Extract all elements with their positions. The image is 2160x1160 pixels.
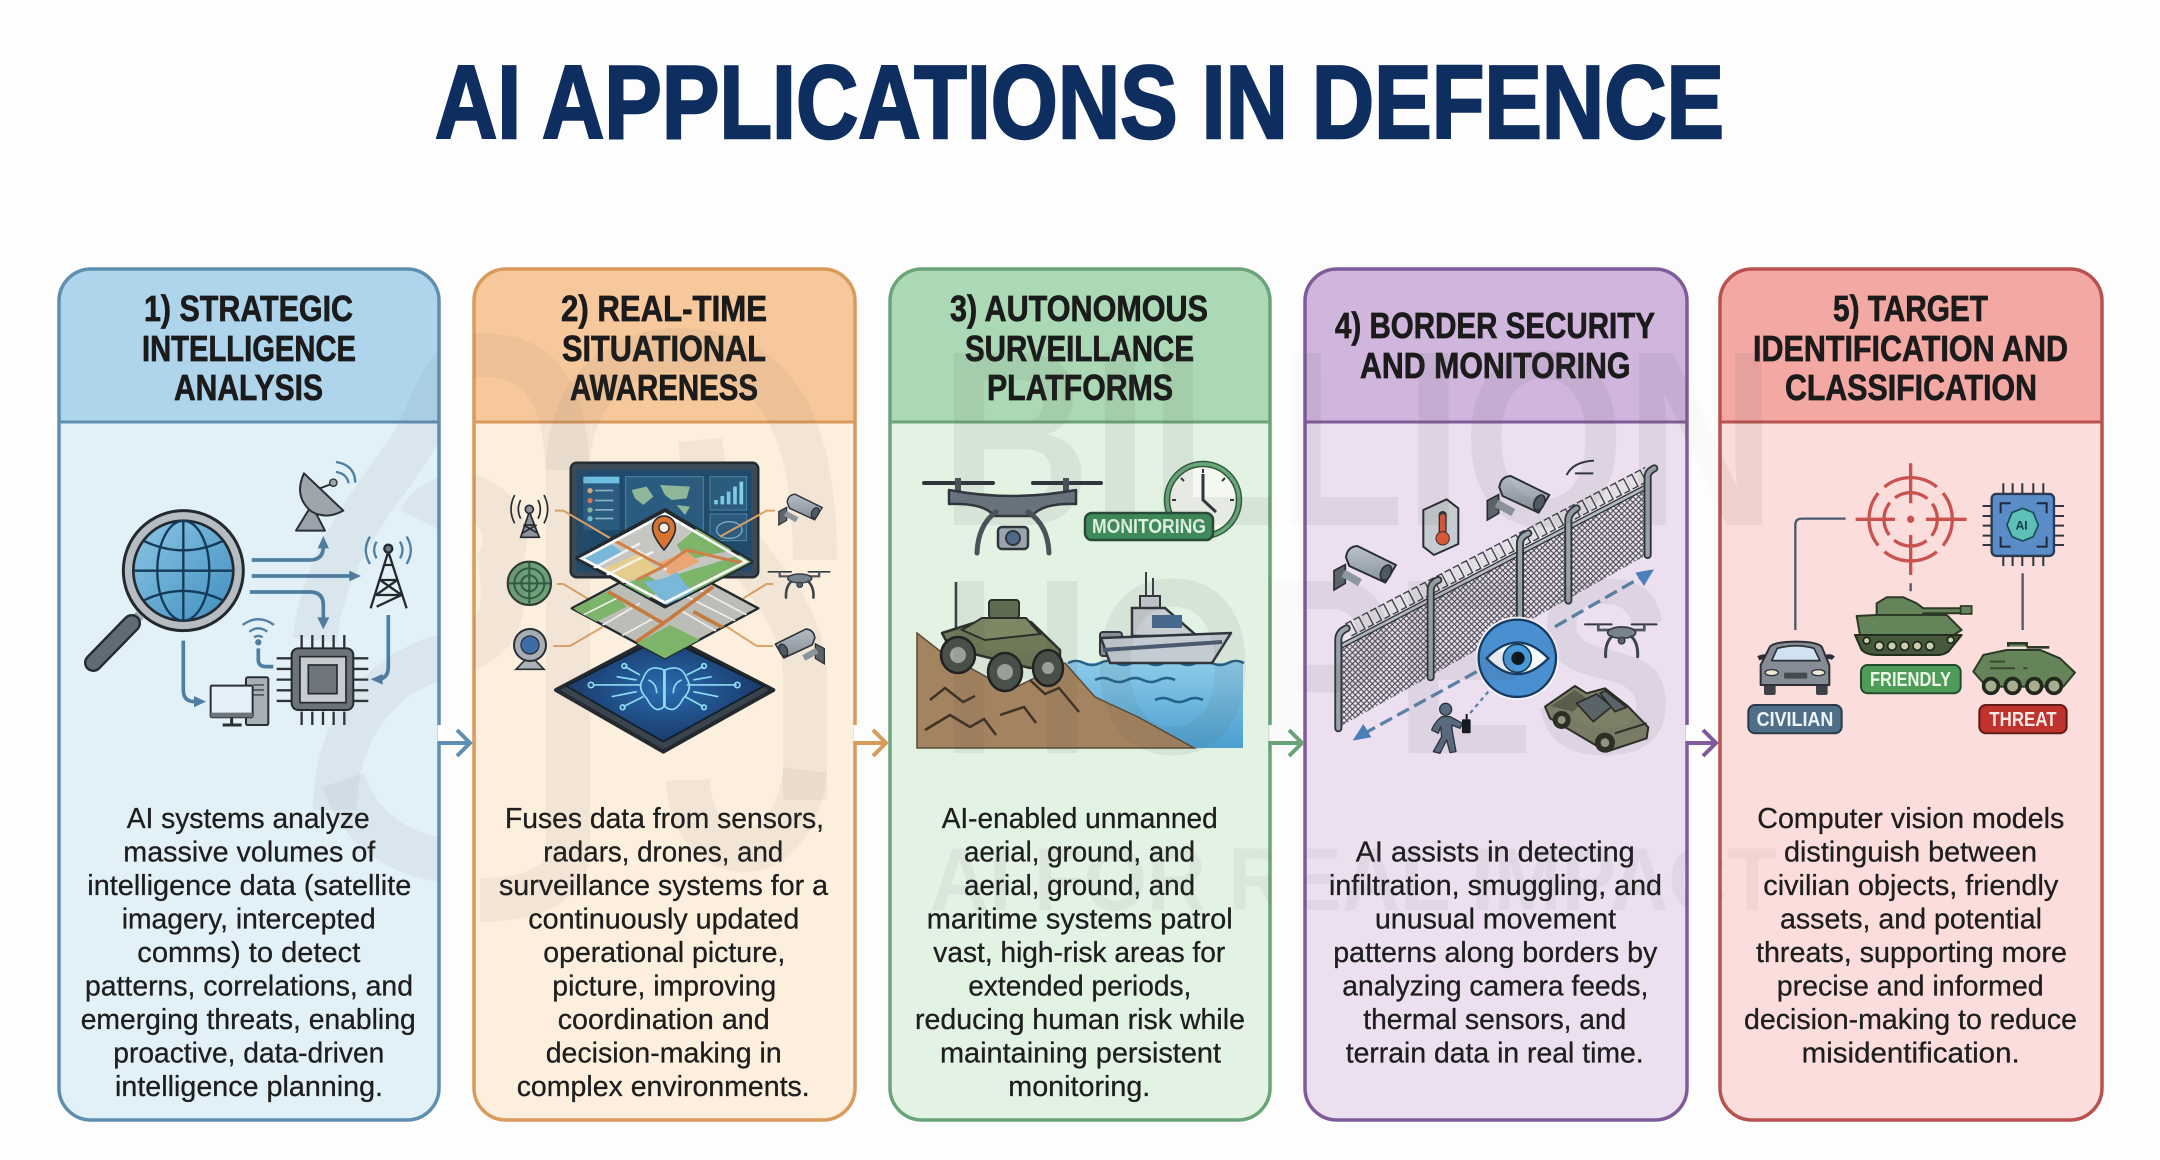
icon: wifi signal <box>243 619 274 644</box>
icon: quadcopter drone <box>924 478 1101 553</box>
panel 1 heading: 1) STRATEGIC <box>144 288 353 329</box>
panel 5 body text <box>1744 803 2077 1070</box>
icon: AI eye <box>1476 617 1559 700</box>
panel 5 heading: CLASSIFICATION <box>1785 367 2037 408</box>
panel 5 heading: 5) TARGET <box>1833 288 1988 329</box>
panel 2 body text <box>499 803 829 1103</box>
panel 1 body text: intelligence planning. <box>115 1071 383 1103</box>
icon: pickup truck <box>1545 686 1648 753</box>
icon: clock <box>1167 464 1239 536</box>
panel 5 body text: assets, and potential <box>1780 904 2042 936</box>
panel: real-time situational awareness <box>474 269 855 1120</box>
icon: lower map layer <box>570 582 760 660</box>
panel 2 body text: coordination and <box>558 1004 770 1036</box>
panel 2 body text: complex environments. <box>517 1071 810 1103</box>
panel 1 body text: patterns, correlations, and <box>85 970 413 1002</box>
icon: friendly tank <box>1855 597 1972 655</box>
badge: friendly <box>1861 665 1961 693</box>
panel 5 body text: distinguish between <box>1784 836 2037 868</box>
panel 4 heading <box>1335 305 1655 386</box>
panel 1 body text: comms) to detect <box>137 937 360 969</box>
panel 4 body text <box>1329 836 1662 1070</box>
icon: radio tower <box>366 537 411 608</box>
panel 5 body text: decision-making to reduce <box>1744 1004 2077 1036</box>
panel 3 heading: SURVEILLANCE <box>965 328 1194 369</box>
panel 2 body text: decision-making in <box>546 1038 782 1070</box>
panel 4 body text: thermal sensors, and <box>1363 1004 1626 1036</box>
scene: rocky coast <box>917 633 1194 748</box>
panel 3 body text: extended periods, <box>968 970 1191 1002</box>
icon: person with radio <box>1432 703 1471 753</box>
panel 3 body text: maritime systems patrol <box>927 904 1233 936</box>
panel 5 body text: Computer vision models <box>1757 803 2064 835</box>
panel 3 body text: aerial, ground, and <box>964 836 1195 868</box>
watermark: Billion Hopes logo and wordmark: AI FOR REAL IMPACT <box>930 829 1777 929</box>
panel 1 body text <box>81 803 416 1103</box>
icon: AI chip: AI <box>2016 518 2028 532</box>
arrow: patrol direction <box>1353 569 1654 741</box>
panel 3 heading <box>950 288 1208 408</box>
icon: webcam <box>514 629 546 669</box>
panel 4 body text: analyzing camera feeds, <box>1342 970 1648 1002</box>
panel 1 body text: intelligence data (satellite <box>87 870 411 902</box>
panel 3 heading: 3) AUTONOMOUS <box>950 288 1208 329</box>
panel 4 body text: patterns along borders by <box>1333 937 1658 969</box>
icon: threat armoured vehicle <box>1973 643 2075 693</box>
panel 4 heading: AND MONITORING <box>1360 345 1630 386</box>
arrow: panel 3 to 4 <box>1268 725 1302 756</box>
badge: monitoring: MONITORING <box>1092 516 1206 538</box>
panel: border security and monitoring <box>1305 269 1687 1120</box>
panel 3 body text <box>915 803 1245 1103</box>
icon: magnifying glass over globe <box>93 511 243 663</box>
panel 4 heading: 4) BORDER SECURITY <box>1335 305 1655 346</box>
icon: security camera top <box>779 494 822 525</box>
panel 3 heading: PLATFORMS <box>987 367 1173 408</box>
panel: target identification and classification <box>1720 269 2102 1120</box>
panel 2 body text: continuously updated <box>528 904 799 936</box>
panel 1 illustration: data network <box>93 462 411 725</box>
icon: dashboard monitor <box>571 463 758 577</box>
icon: device with AI brain <box>556 633 773 752</box>
icon: distant drone fragment <box>1567 461 1594 475</box>
arrow: panel 1 to 2 <box>438 725 470 756</box>
panel: strategic intelligence analysis <box>59 269 439 1120</box>
arrow: panel 2 to 3 <box>854 725 886 756</box>
connector lines <box>553 511 775 646</box>
panel 1 heading: ANALYSIS <box>174 367 323 408</box>
panel 5 body text: civilian objects, friendly <box>1763 870 2059 902</box>
badge: threat: THREAT <box>1989 709 2057 731</box>
panel 5 body text: misidentification. <box>1802 1038 2020 1070</box>
panel 1 body text: AI systems analyze <box>127 803 370 835</box>
panel 3 illustration: unmanned platforms <box>917 464 1244 748</box>
panel 3 body text: aerial, ground, and <box>964 870 1195 902</box>
icon: upper map layer with location pin <box>577 510 753 607</box>
panel 5 illustration: target classification <box>1748 463 2075 733</box>
panel 5 header band <box>1720 269 2102 422</box>
panel: autonomous surveillance platforms <box>890 269 1270 1120</box>
panel 4 body text: AI assists in detecting <box>1356 836 1635 868</box>
panel 4 body text: terrain data in real time. <box>1346 1038 1644 1070</box>
icon: radar <box>508 562 551 605</box>
icon: AI chip <box>277 635 368 725</box>
panel 3 body text: vast, high-risk areas for <box>933 937 1226 969</box>
icon: chain-link fence <box>1338 468 1654 728</box>
panel 2 header band <box>474 269 855 422</box>
panel 1 body text: imagery, intercepted <box>122 904 376 936</box>
watermark: Billion Hopes logo and wordmark: BILLION <box>940 299 1776 578</box>
icon: security camera left <box>1334 546 1396 590</box>
panel 2 heading: 2) REAL-TIME <box>561 288 767 329</box>
icon: flow arrows <box>183 536 388 707</box>
badge: threat <box>1979 705 2067 733</box>
icon: patrol boat <box>1100 572 1231 663</box>
connector lines <box>1795 519 2023 630</box>
panel 5 heading <box>1753 288 2068 408</box>
panel 3 body text: reducing human risk while <box>915 1004 1245 1036</box>
panel 2 body text: Fuses data from sensors, <box>505 803 824 835</box>
panel 1 header band <box>59 269 439 422</box>
panel 1 body text: emerging threats, enabling <box>81 1004 416 1036</box>
panel 5 body text: threats, supporting more <box>1756 937 2067 969</box>
panel 2 heading: SITUATIONAL <box>562 328 766 369</box>
panel 2 body text: radars, drones, and <box>543 836 783 868</box>
panel 4 body text: infiltration, smuggling, and <box>1329 870 1662 902</box>
scene: water <box>1065 661 1244 748</box>
panel 1 heading <box>142 288 356 408</box>
panel 2 body text: surveillance systems for a <box>499 870 829 902</box>
watermark: Billion Hopes logo and wordmark: BILLION <box>940 299 1776 578</box>
icon: surveillance drone <box>1585 624 1657 657</box>
watermark: Billion Hopes logo and wordmark: HOPES <box>940 527 1674 806</box>
icon: signal tower <box>511 495 548 537</box>
panel 3 body text: AI-enabled unmanned <box>942 803 1218 835</box>
icon: desktop computer <box>211 677 268 725</box>
panel 4 illustration: border fence <box>1334 461 1657 753</box>
panel 2 heading <box>561 288 767 408</box>
icon: security camera bottom <box>775 629 824 664</box>
panel 2 illustration: layered operational picture <box>508 463 830 752</box>
title: AI APPLICATIONS IN DEFENCE <box>435 45 1724 161</box>
panel 4 body text: unusual movement <box>1375 904 1616 936</box>
panel 4 header band <box>1305 269 1687 422</box>
arrow: panel 4 to 5 <box>1686 725 1716 756</box>
badge: civilian: CIVILIAN <box>1757 709 1833 731</box>
icon: satellite dish <box>296 462 355 531</box>
panel 2 heading: AWARENESS <box>570 367 758 408</box>
panel 1 heading: INTELLIGENCE <box>142 328 356 369</box>
icon: ground vehicle <box>941 582 1063 691</box>
panel 3 body text: monitoring. <box>1008 1071 1150 1103</box>
icon: drone <box>768 572 830 598</box>
panel 2 body text: operational picture, <box>543 937 785 969</box>
icon: security camera top <box>1487 476 1549 520</box>
panel 2 body text: picture, improving <box>552 970 776 1002</box>
watermark: Billion Hopes logo and wordmark <box>315 299 1777 929</box>
panel 1 body text: proactive, data-driven <box>113 1038 384 1070</box>
panel 3 header band <box>890 269 1270 422</box>
panel 5 heading: IDENTIFICATION AND <box>1753 328 2068 369</box>
icon: crosshair <box>1856 463 1967 575</box>
panel 1 body text: massive volumes of <box>123 836 376 868</box>
panel 5 body text: precise and informed <box>1777 970 2044 1002</box>
icon: thermal sensor <box>1423 499 1458 555</box>
icon: AI chip <box>1983 483 2064 566</box>
panel 3 body text: maintaining persistent <box>940 1038 1221 1070</box>
icon: civilian car <box>1758 642 1833 695</box>
badge: friendly: FRIENDLY <box>1870 669 1951 691</box>
watermark: Billion Hopes logo and wordmark: HOPES <box>940 527 1674 806</box>
